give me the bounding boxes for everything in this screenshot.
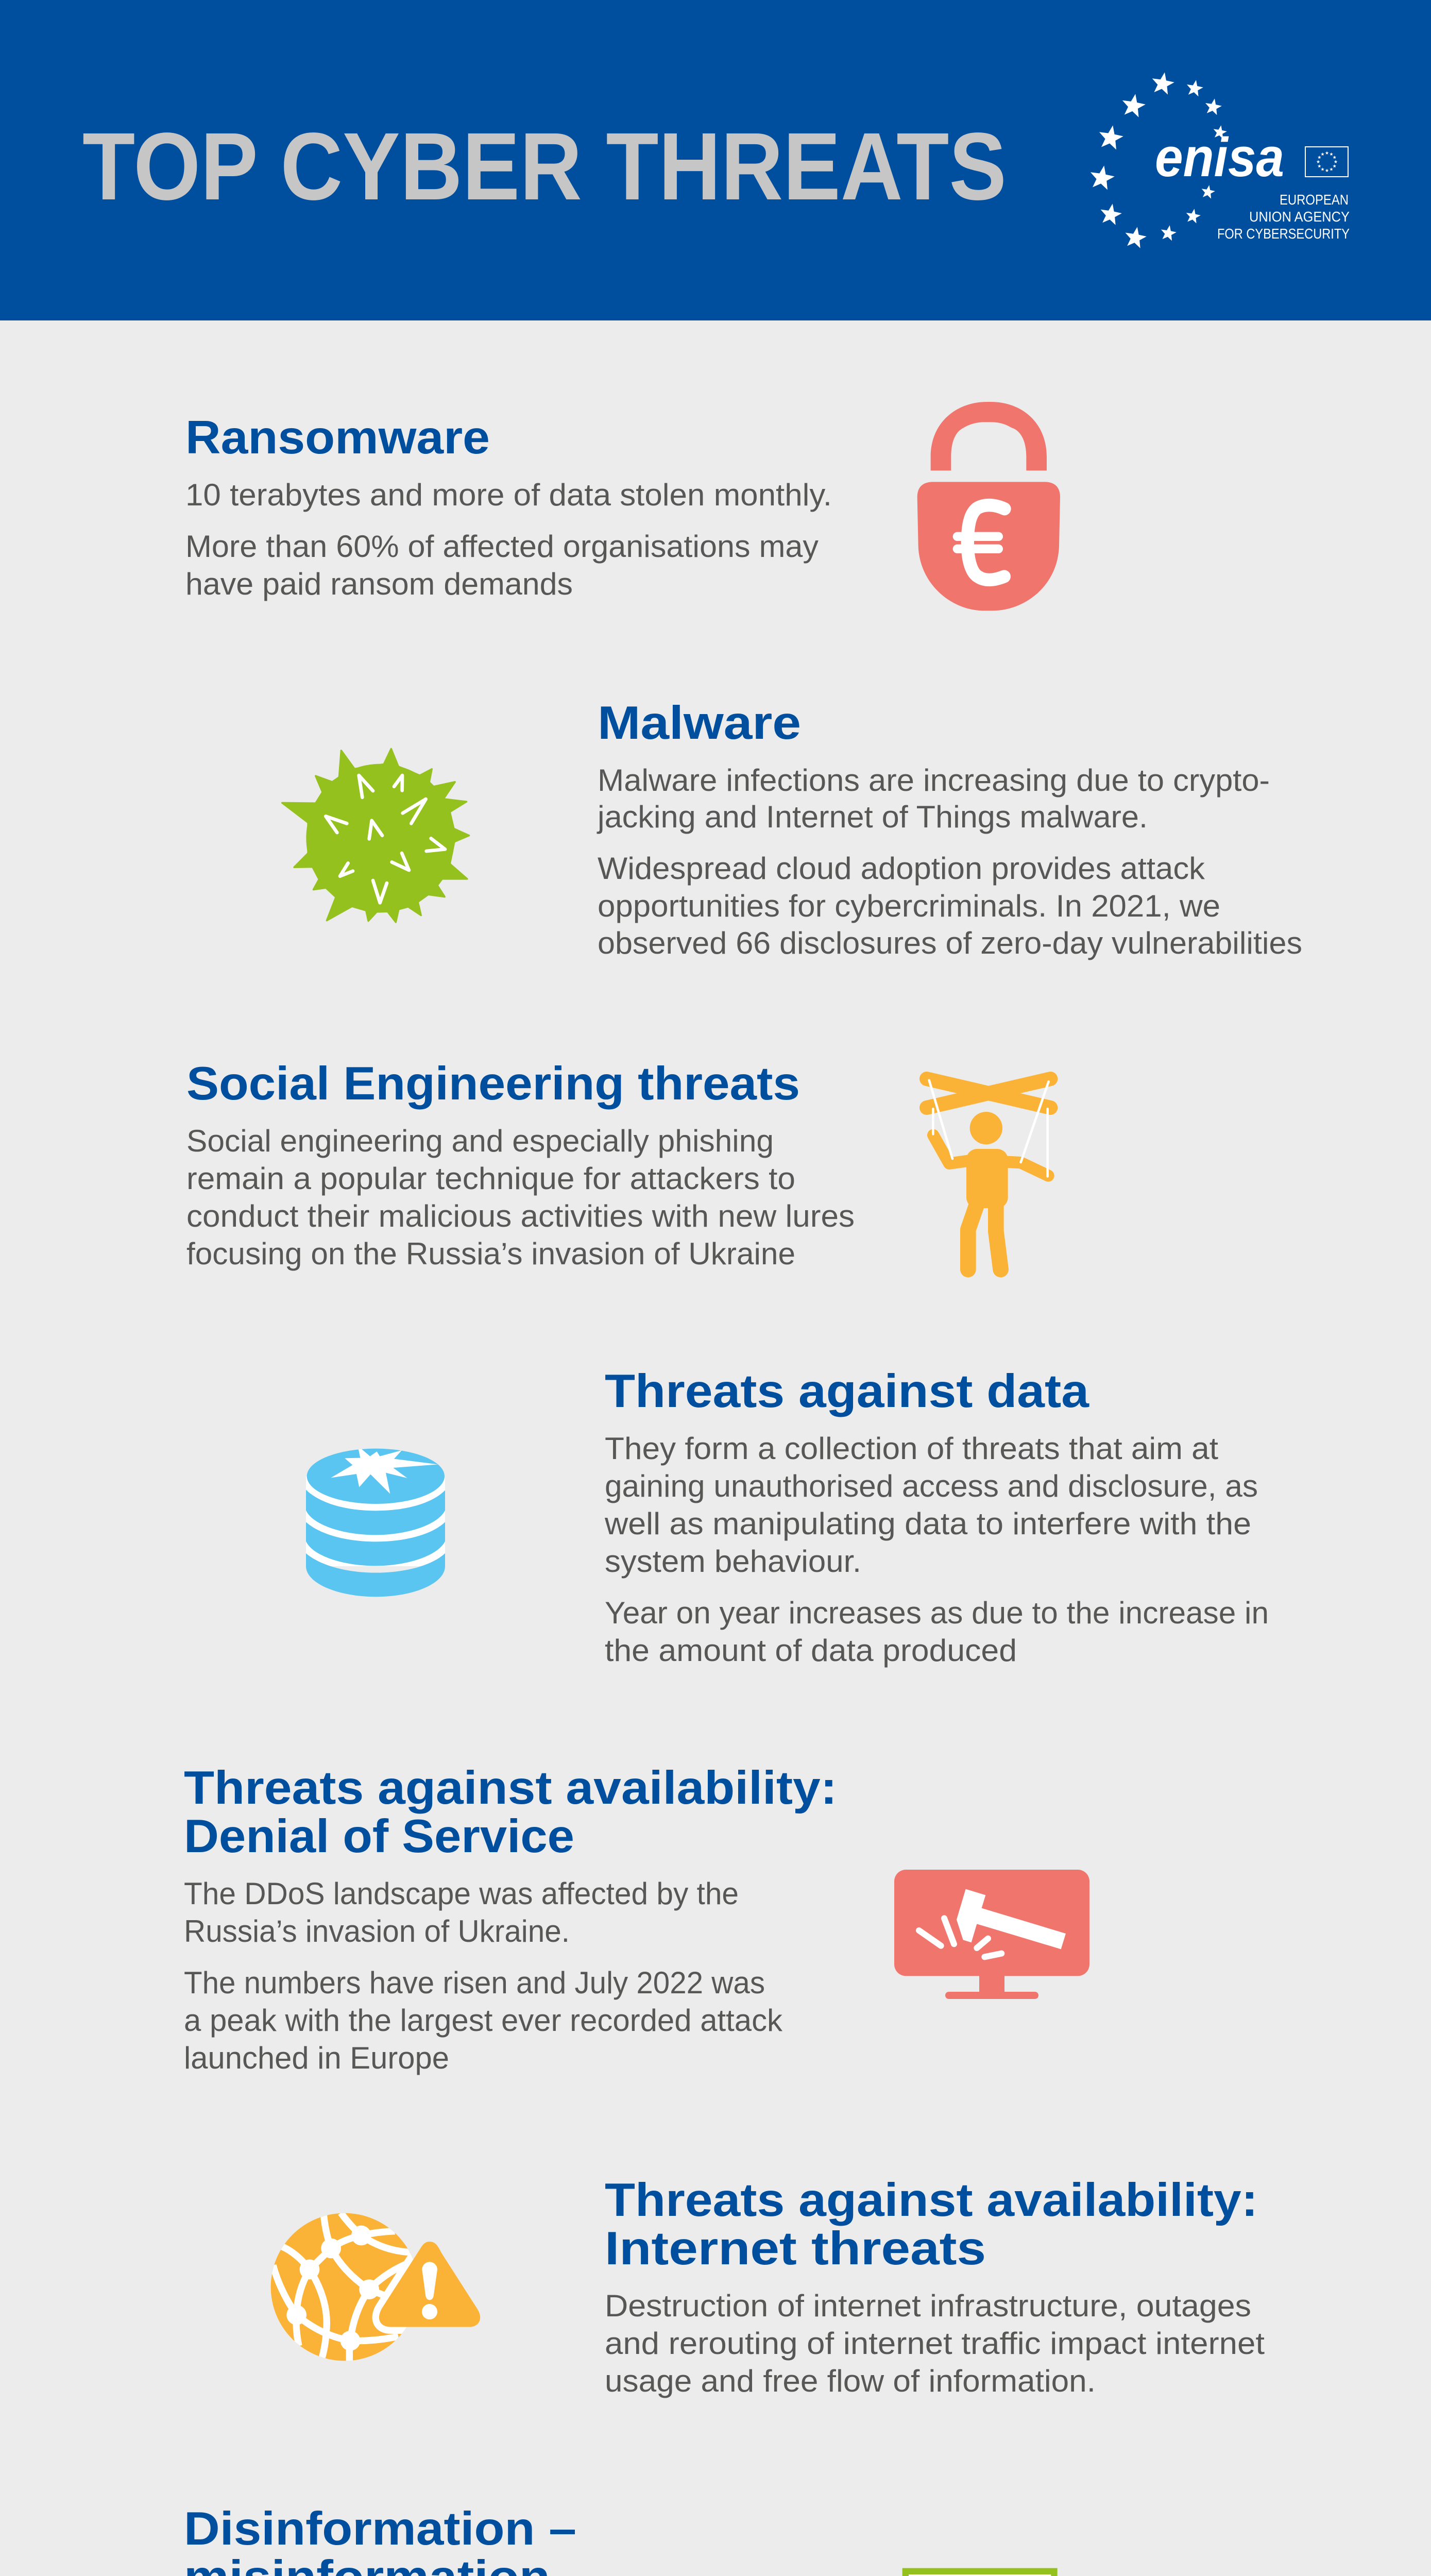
text: malware body: jacking and Internet of Things malware. [597, 800, 1148, 834]
heading: denial of service: Threats against availability: [184, 1762, 837, 1814]
logo: enisa white: UNION AGENCY [1249, 209, 1350, 225]
text: denial of service body: a peak with the largest ever recorded attack [184, 2003, 783, 2038]
text: denial of service body: launched in Europe [184, 2041, 449, 2075]
text: malware body: Malware infections are increasing due to crypto- [598, 763, 1270, 798]
text: internet threats body: Destruction of internet infrastructure, outages [605, 2289, 1251, 2323]
text: malware body: observed 66 disclosures of zero-day vulnerabilities [598, 926, 1302, 960]
text: denial of service body: The DDoS landscape was affected by the [184, 1876, 739, 1911]
panel: denial of service [184, 1762, 1089, 2075]
panel: ransomware [185, 402, 1060, 611]
text: internet threats body [605, 2289, 1265, 2398]
text: threats against data body: well as manipulating data to interfere with the [604, 1506, 1251, 1541]
heading: internet threats [605, 2174, 1258, 2275]
text: threats against data body: system behaviour. [605, 1544, 861, 1579]
icon: puppet [927, 1079, 1050, 1269]
icon: hammer on monitor [894, 1870, 1089, 1999]
text: threats against data body: the amount of data produced [605, 1633, 1017, 1668]
icon: padlock with euro [917, 402, 1060, 611]
heading: social engineering: Social Engineering threats [186, 1058, 800, 1110]
text: malware body: opportunities for cybercriminals. In 2021, we [598, 889, 1220, 923]
text: internet threats body: usage and free flow of information. [605, 2364, 1096, 2398]
heading: denial of service: Denial of Service [184, 1810, 574, 1862]
panel: disinformation [184, 2503, 1098, 2576]
logo: enisa white: EUROPEAN [1280, 192, 1349, 208]
text: denial of service body: The numbers have risen and July 2022 was [184, 1965, 765, 2000]
icon: database [306, 1449, 445, 1597]
icon: globe with warning [271, 2213, 480, 2362]
text: ransomware body [185, 478, 832, 601]
logo: enisa white [1088, 71, 1350, 249]
text: threats against data body: gaining unauthorised access and disclosure, as [605, 1469, 1258, 1503]
text: social engineering body: remain a popular technique for attackers to [186, 1161, 795, 1196]
icon: fake newspaper [902, 2568, 1098, 2576]
logo: enisa white: enisa [1155, 126, 1284, 188]
text: threats against data body [604, 1431, 1269, 1668]
text: ransomware body: 10 terabytes and more of data stolen monthly. [185, 478, 832, 512]
text: ransomware body: More than 60% of affected organisations may [185, 529, 819, 564]
heading: malware: Malware [598, 697, 801, 749]
text: internet threats body: and rerouting of internet traffic impact internet [605, 2326, 1265, 2361]
heading: ransomware: Ransomware [185, 412, 490, 464]
text: social engineering body: conduct their malicious activities with new lures [186, 1199, 855, 1233]
text: social engineering body: Social engineering and especially phishing [186, 1124, 774, 1158]
text: threats against data body: Year on year increases as due to the increase in [605, 1596, 1269, 1630]
heading: internet threats: Internet threats [605, 2223, 986, 2275]
heading: threats against data: Threats against data [605, 1365, 1089, 1417]
title: TOP CYBER THREATS [82, 113, 1007, 220]
text: malware body: Widespread cloud adoption provides attack [598, 851, 1205, 886]
text: malware body [597, 763, 1302, 960]
icon: virus [282, 749, 469, 922]
panel: internet threats [271, 2174, 1265, 2398]
panel: social engineering [186, 1058, 1050, 1271]
text: threats against data body: They form a collection of threats that aim at [605, 1431, 1218, 1466]
heading: internet threats: Threats against availability: [605, 2174, 1258, 2226]
text: denial of service body: Russia’s invasion of Ukraine. [184, 1914, 570, 1948]
text: social engineering body [186, 1124, 855, 1271]
heading: denial of service [184, 1762, 837, 1862]
logo: enisa white: FOR CYBERSECURITY [1217, 226, 1350, 242]
heading: disinformation: Disinformation – [184, 2503, 576, 2555]
header band [0, 0, 1431, 320]
panel: malware [282, 697, 1302, 960]
panel: threats against data [306, 1365, 1269, 1668]
text: social engineering body: focusing on the Russia’s invasion of Ukraine [186, 1236, 795, 1271]
text: ransomware body: have paid ransom demands [185, 567, 573, 601]
text: denial of service body [184, 1876, 783, 2075]
heading: disinformation [184, 2503, 576, 2576]
